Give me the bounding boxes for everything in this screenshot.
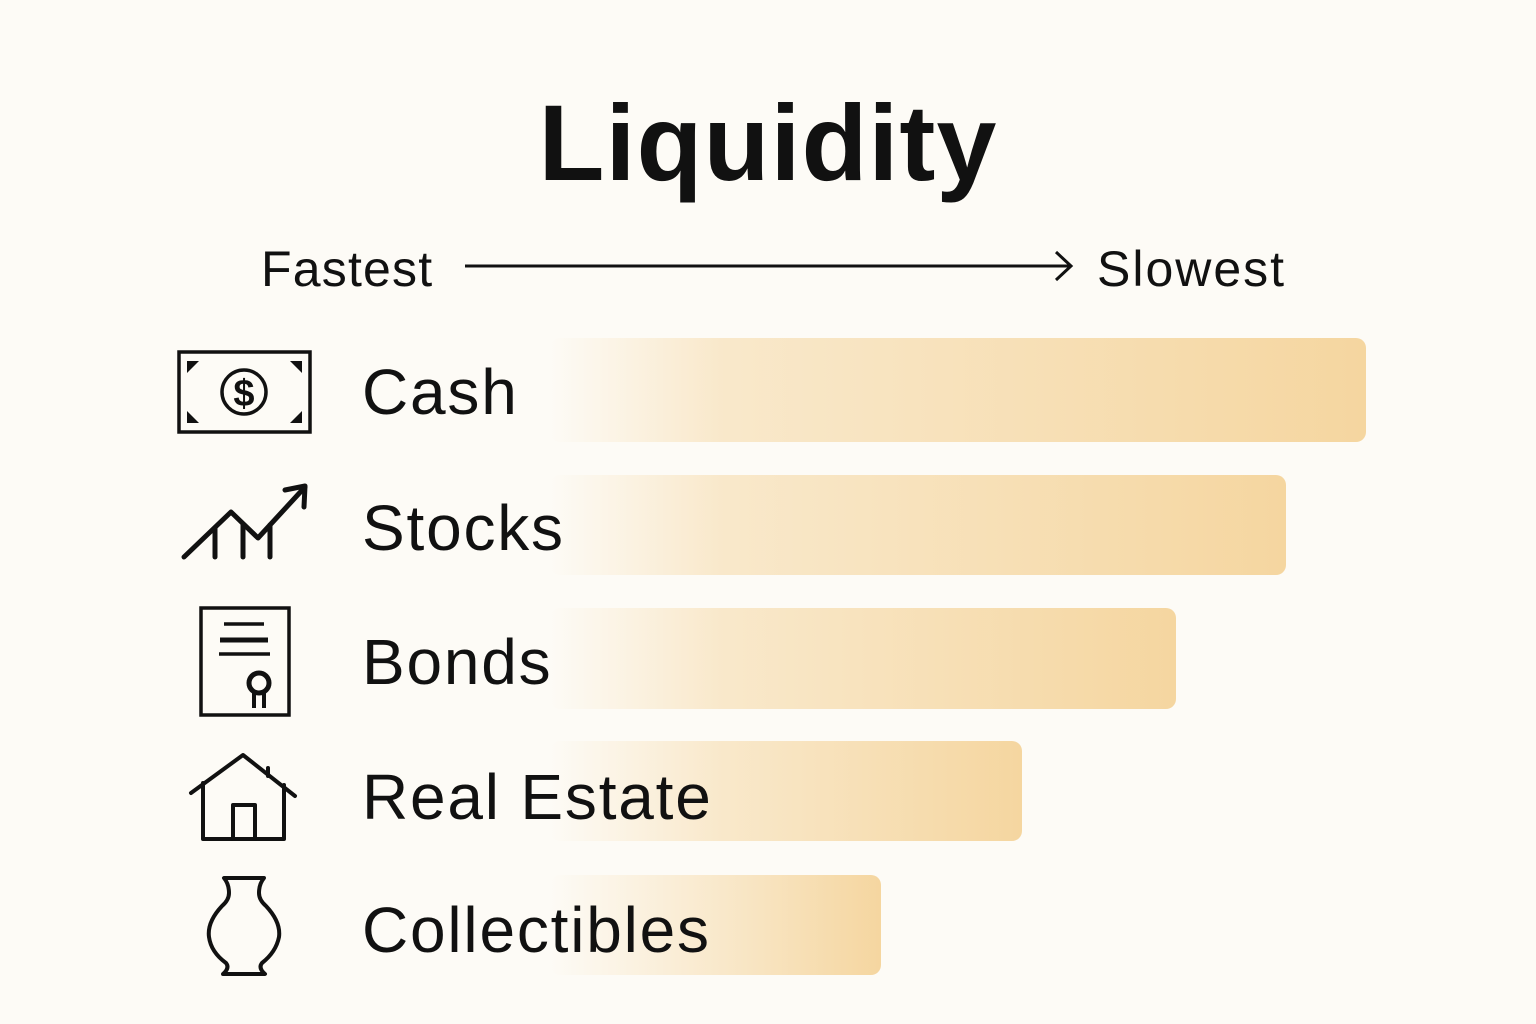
axis label: slowest: Slowest <box>1097 241 1286 297</box>
arrow: fastest to slowest <box>465 250 1074 282</box>
icon: stocks <box>184 486 305 557</box>
icon: cash: $ <box>233 373 255 415</box>
icon: bond certificate <box>201 608 289 715</box>
icon: vase <box>209 878 279 974</box>
bar: real estate <box>550 741 1022 841</box>
bar: collectibles <box>550 875 881 975</box>
bar: stocks <box>550 475 1286 575</box>
title: Liquidity <box>539 82 997 203</box>
icon: cash <box>179 352 310 432</box>
icon: house <box>191 755 295 839</box>
label: collectibles: Collectibles <box>362 894 711 966</box>
bar: bonds <box>550 608 1176 709</box>
label: real estate: Real Estate <box>362 761 713 833</box>
label: cash: Cash <box>362 356 519 428</box>
label: bonds: Bonds <box>362 626 552 698</box>
axis label: fastest: Fastest <box>261 241 433 297</box>
label: stocks: Stocks <box>362 492 565 564</box>
bar: cash <box>550 338 1366 442</box>
